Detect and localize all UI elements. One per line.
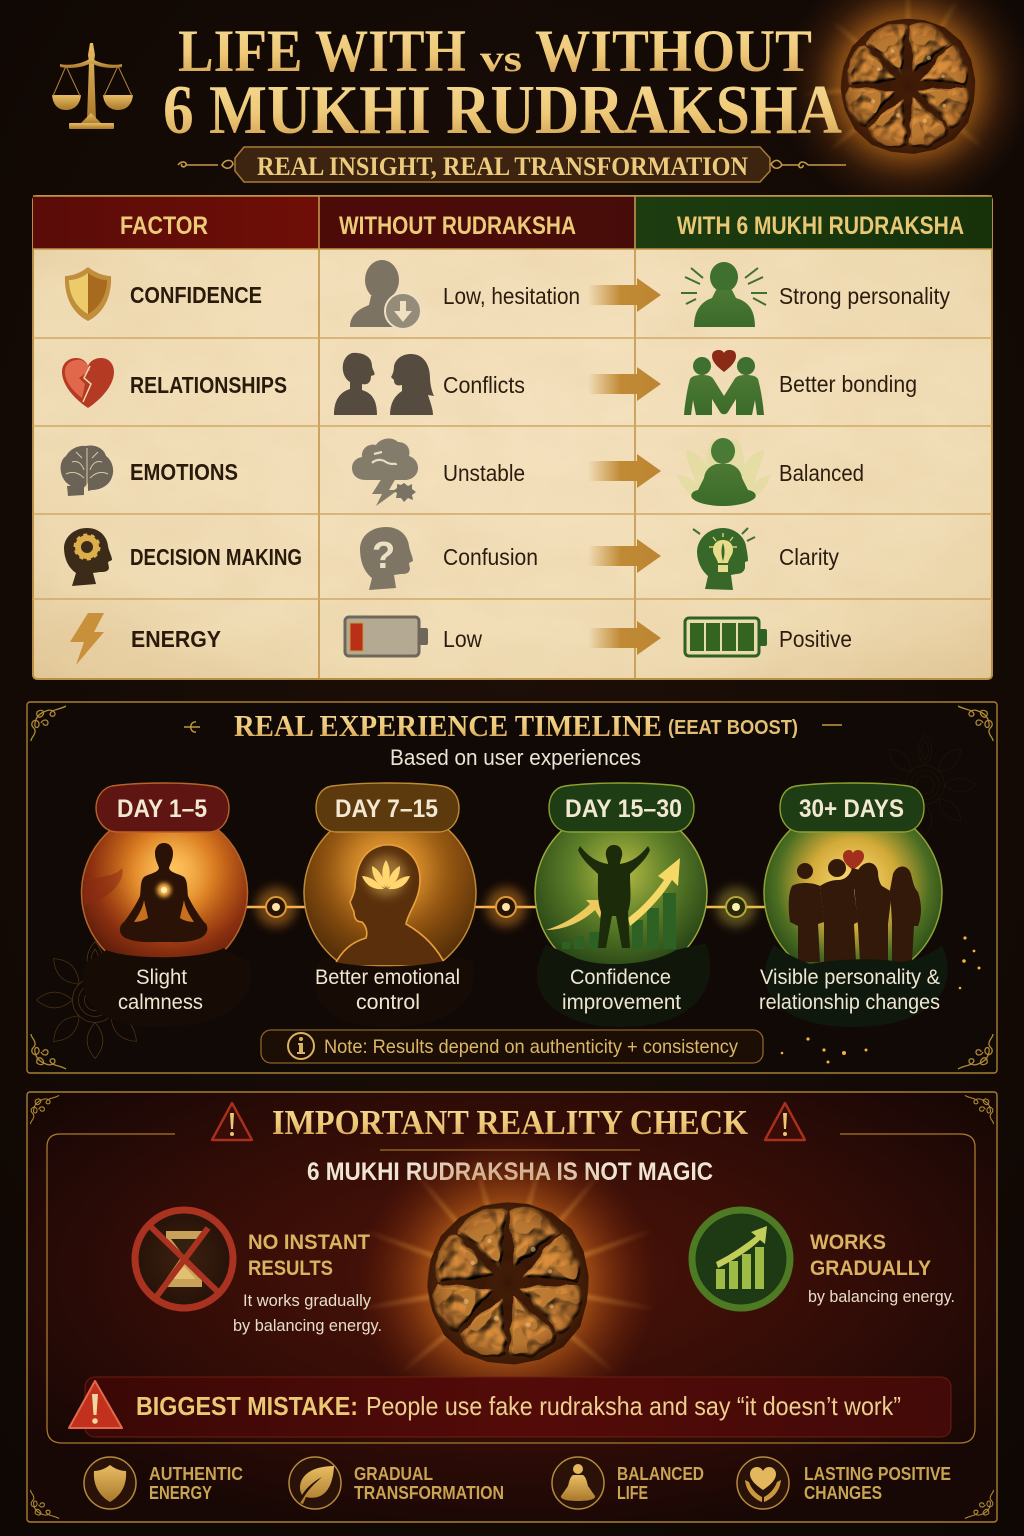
table parchment (33, 196, 992, 679)
icon: meditating figure on lotus (677, 438, 771, 506)
pill: 30+ days (780, 783, 924, 832)
callout: biggest mistake: BIGGEST MISTAKE: (136, 1391, 358, 1421)
note pill: Note: Results depend on authenticity + consistency (324, 1036, 738, 1058)
callout: no instant results: NO INSTANT (248, 1231, 370, 1254)
icon: confident person (681, 262, 767, 327)
panel: comparison table (33, 196, 992, 679)
base blob (83, 948, 251, 1027)
triumphant figure (578, 845, 650, 948)
icon: shield (65, 267, 111, 321)
caption: visible personality and relationship changes (759, 966, 940, 1014)
glowing lotus in brain (362, 860, 410, 889)
base blob (765, 945, 948, 1027)
callout: no instant results: by balancing energy. (233, 1316, 382, 1335)
meditating silhouette (120, 843, 207, 942)
pill: day 15-30 (549, 783, 694, 832)
growth bars (562, 893, 676, 949)
icon: storm cloud (352, 438, 418, 506)
title (163, 18, 842, 149)
panel: real experience timeline (27, 702, 997, 1073)
benefit: gradual transformation: TRANSFORMATION (354, 1483, 504, 1503)
row: confidence: Low, hesitation (443, 283, 580, 309)
panel: important reality check (27, 1092, 997, 1522)
base blob (315, 958, 474, 1027)
pill: day 7-15 (316, 783, 459, 832)
row: emotions (61, 438, 864, 506)
group of four silhouettes (789, 859, 921, 962)
arm gaps (134, 900, 194, 922)
callout: works gradually (692, 1210, 955, 1308)
benefit: lasting positive changes: LASTING POSITIVE (804, 1464, 951, 1484)
stage: day 7-15 (304, 783, 476, 1027)
row: confidence (65, 260, 950, 329)
icon: warning right (765, 1103, 805, 1140)
benefit: balanced life: LIFE (617, 1483, 648, 1503)
row: relationships (62, 350, 917, 415)
arrow (588, 539, 661, 573)
arrow (588, 278, 661, 312)
icon: balance scale (52, 43, 133, 129)
benefit: gradual transformation: GRADUAL (354, 1464, 433, 1484)
benefit: lasting positive changes (737, 1457, 951, 1509)
benefit: authentic energy: ENERGY (149, 1483, 212, 1503)
panel: real experience timeline: (EEAT BOOST) (668, 717, 798, 739)
row: relationships: RELATIONSHIPS (130, 372, 287, 398)
caption: confidence improvement: Confidence (570, 966, 671, 989)
icon: brain (61, 446, 113, 496)
row: confidence: CONFIDENCE (130, 282, 262, 308)
callout: biggest mistake: People use fake rudraksha and say “it doesn’t work” (366, 1391, 901, 1421)
stage: day 1-5 (82, 783, 251, 1027)
connectors between stages (243, 887, 768, 927)
row: confidence: Strong personality (779, 283, 950, 309)
icon: head with lightbulb (693, 528, 755, 590)
icon: lightning bolt (70, 613, 104, 665)
base blob (537, 944, 710, 1027)
table header row: WITHOUT RUDRAKSHA (339, 212, 576, 240)
central rudraksha bead (358, 1133, 658, 1433)
caption: visible personality and relationship changes: Visible personality & (760, 966, 940, 989)
title: WITHOUT (535, 18, 812, 84)
benefit: authentic energy: AUTHENTIC (149, 1464, 243, 1484)
icon: low battery (345, 617, 428, 656)
table header row: FACTOR (120, 212, 208, 240)
heading: IMPORTANT REALITY CHECK (272, 1103, 748, 1142)
row: decision making: Confusion (443, 544, 538, 570)
benefit: gradual transformation (289, 1457, 504, 1509)
table header row: WITH 6 MUKHI RUDRAKSHA (677, 212, 964, 240)
callout: biggest mistake (69, 1377, 951, 1437)
icon: glowing rudraksha bead (780, 0, 1024, 213)
stage: day 15-30 (535, 783, 710, 1027)
table header row (33, 196, 992, 679)
caption: slight calmness (118, 966, 203, 1014)
stage: 30+ days (759, 783, 948, 1027)
callout: works gradually: GRADUALLY (810, 1257, 931, 1280)
caption: visible personality and relationship changes: relationship changes (759, 991, 940, 1014)
title: 6 MUKHI RUDRAKSHA (163, 72, 842, 149)
arrow (588, 454, 661, 488)
caption: better emotional control: control (356, 991, 420, 1014)
arrow (588, 621, 661, 655)
icon: head with gear (64, 528, 112, 586)
icon: info (288, 1033, 314, 1059)
pill: day 15-30: DAY 15–30 (565, 795, 682, 823)
callout: no instant results: RESULTS (248, 1257, 333, 1280)
icon: head with question mark (360, 527, 413, 590)
benefit: balanced life: BALANCED (617, 1464, 704, 1484)
benefit: balanced life (552, 1457, 704, 1509)
heart (843, 850, 864, 870)
title: vs (480, 38, 522, 80)
callout: no instant results: It works gradually (243, 1291, 371, 1310)
row: emotions: Unstable (443, 460, 525, 486)
row: energy: Low (443, 626, 482, 652)
callout: works gradually: WORKS (810, 1231, 886, 1254)
reality panel frame (27, 1092, 997, 1522)
row: decision making (64, 527, 839, 590)
subtitle banner (178, 147, 846, 182)
arrow (588, 367, 661, 401)
row: relationships: Conflicts (443, 372, 525, 398)
timeline frame (27, 702, 997, 1073)
pill: day 1-5: DAY 1–5 (117, 795, 207, 823)
icon: couple with heart (684, 350, 764, 415)
benefit: authentic energy (84, 1457, 243, 1509)
caption: better emotional control: Better emotional (315, 966, 460, 989)
row: energy: Positive (779, 626, 852, 652)
caption: slight calmness: calmness (118, 991, 203, 1014)
icon: warning left (212, 1103, 252, 1140)
profile head silhouette (334, 845, 446, 966)
icon: growth chart (692, 1210, 790, 1308)
icon: two people in conflict (334, 353, 434, 415)
icon: person with down arrow (350, 260, 421, 329)
benefits row (84, 1457, 951, 1509)
row: emotions: EMOTIONS (130, 459, 238, 485)
caption: confidence improvement: improvement (562, 991, 681, 1014)
row: energy (70, 613, 852, 665)
pill: 30+ days: 30+ DAYS (799, 795, 904, 823)
icon: crossed hourglass (135, 1210, 233, 1308)
row: decision making: DECISION MAKING (130, 544, 302, 570)
pill: day 7-15: DAY 7–15 (335, 795, 438, 823)
icon: broken heart (62, 358, 114, 408)
title: LIFE WITH (178, 18, 466, 84)
rising arrows (546, 900, 606, 930)
inner frame (47, 1134, 975, 1443)
pill: day 1-5 (96, 783, 229, 832)
caption: confidence improvement (562, 966, 681, 1014)
benefit: lasting positive changes: CHANGES (804, 1483, 882, 1503)
callout: works gradually: by balancing energy. (808, 1287, 955, 1306)
icon: head with question mark: ? (372, 535, 395, 577)
timeline heading: REAL EXPERIENCE TIMELINE (234, 708, 662, 743)
note pill (261, 1030, 763, 1063)
caption: better emotional control (315, 966, 460, 1014)
row: emotions: Balanced (779, 460, 864, 486)
row: energy: ENERGY (131, 626, 221, 652)
subtitle banner: REAL INSIGHT, REAL TRANSFORMATION (257, 152, 748, 181)
decorative sparkles (781, 936, 980, 1064)
icon: full battery (685, 618, 767, 656)
row: decision making: Clarity (779, 544, 839, 570)
row: relationships: Better bonding (779, 371, 917, 397)
icon: warning triangle (69, 1381, 122, 1428)
caption: slight calmness: Slight (136, 966, 187, 989)
subheading: 6 MUKHI RUDRAKSHA IS NOT MAGIC (307, 1158, 713, 1186)
timeline subheading: Based on user experiences (390, 745, 641, 770)
header (52, 0, 1024, 213)
callout: no instant results (135, 1210, 382, 1335)
